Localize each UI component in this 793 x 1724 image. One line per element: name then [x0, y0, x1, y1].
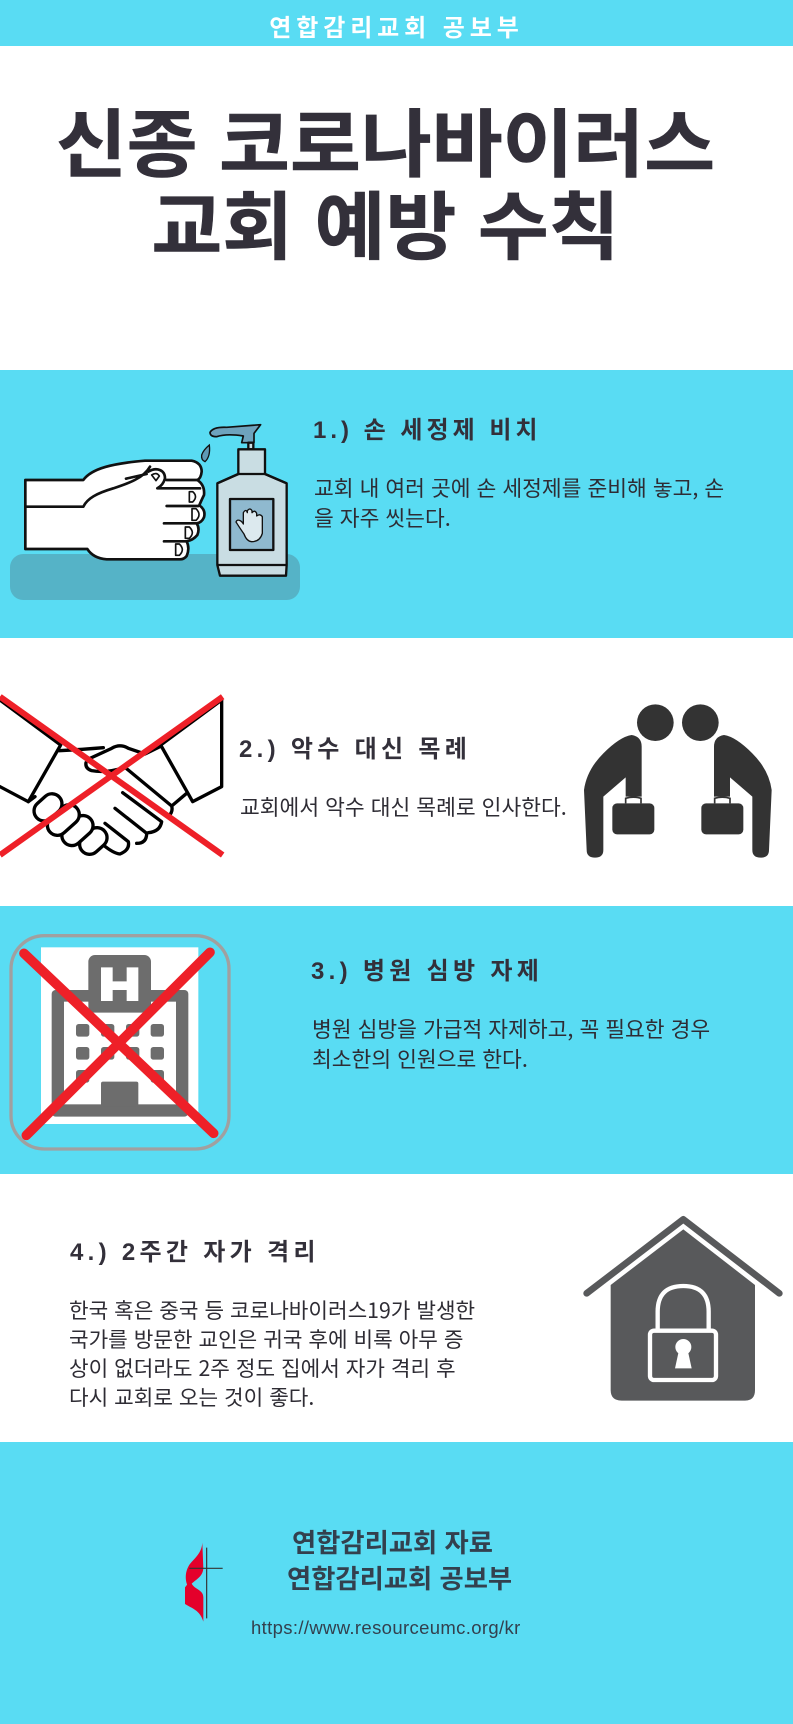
title: 신종 코로나바이러스: [56, 86, 715, 193]
step 1 text: [314, 472, 724, 533]
panel: footer: [0, 1442, 793, 1724]
icon: cross and flame logo: [185, 1542, 223, 1622]
icon: two people bowing: [584, 704, 772, 858]
step 1 heading: 1.) 손 세정제 비치: [313, 417, 542, 444]
icon: crossed-out handshake: [0, 694, 224, 858]
panel: step 1 hand sanitizer: [0, 370, 793, 638]
footer source text: 연합감리교회 공보부: [287, 1557, 512, 1596]
step 3 text: [312, 1013, 710, 1074]
step 3 heading: 3.) 병원 심방 자제: [311, 958, 543, 985]
title: [56, 86, 715, 275]
footer source text: 연합감리교회 자료: [292, 1521, 493, 1560]
step 4 text: 상이 없더라도 2주 정도 집에서 자가 격리 후: [69, 1352, 456, 1383]
step 3 text: 병원 심방을 가급적 자제하고, 꼭 필요한 경우: [312, 1013, 710, 1044]
panel: step 4 two-week self-quarantine: [69, 1216, 783, 1412]
footer source text: [287, 1521, 512, 1596]
top banner: [0, 0, 793, 46]
icon: crossed-out hospital: [9, 934, 231, 1151]
title: 교회 예방 수칙: [151, 169, 620, 275]
step 2 text: 교회에서 악수 대신 목례로 인사한다.: [240, 791, 567, 822]
panel: step 3 avoid hospital visits: [0, 906, 793, 1174]
panel: step 2 bow instead of handshake: [0, 694, 772, 858]
step 4 heading: 4.) 2주간 자가 격리: [70, 1239, 320, 1266]
banner label: 연합감리교회 공보부: [269, 8, 524, 43]
step 1 text: 을 자주 씻는다.: [314, 502, 451, 533]
step 4 text: 국가를 방문한 교인은 귀국 후에 비록 아무 증: [69, 1323, 463, 1354]
step 4 text: 다시 교회로 오는 것이 좋다.: [69, 1381, 314, 1412]
icon: hand and sanitizer bottle: [10, 424, 300, 600]
footer URL: https://www.resourceumc.org/kr: [251, 1617, 521, 1638]
step 1 text: 교회 내 여러 곳에 손 세정제를 준비해 놓고, 손: [314, 472, 724, 503]
step 4 text: 한국 혹은 중국 등 코로나바이러스19가 발생한: [69, 1294, 475, 1325]
step 3 text: 최소한의 인원으로 한다.: [312, 1043, 528, 1074]
step 2 heading: 2.) 악수 대신 목례: [239, 736, 471, 763]
icon: house with padlock: [583, 1216, 783, 1401]
step 4 text: [69, 1294, 475, 1412]
